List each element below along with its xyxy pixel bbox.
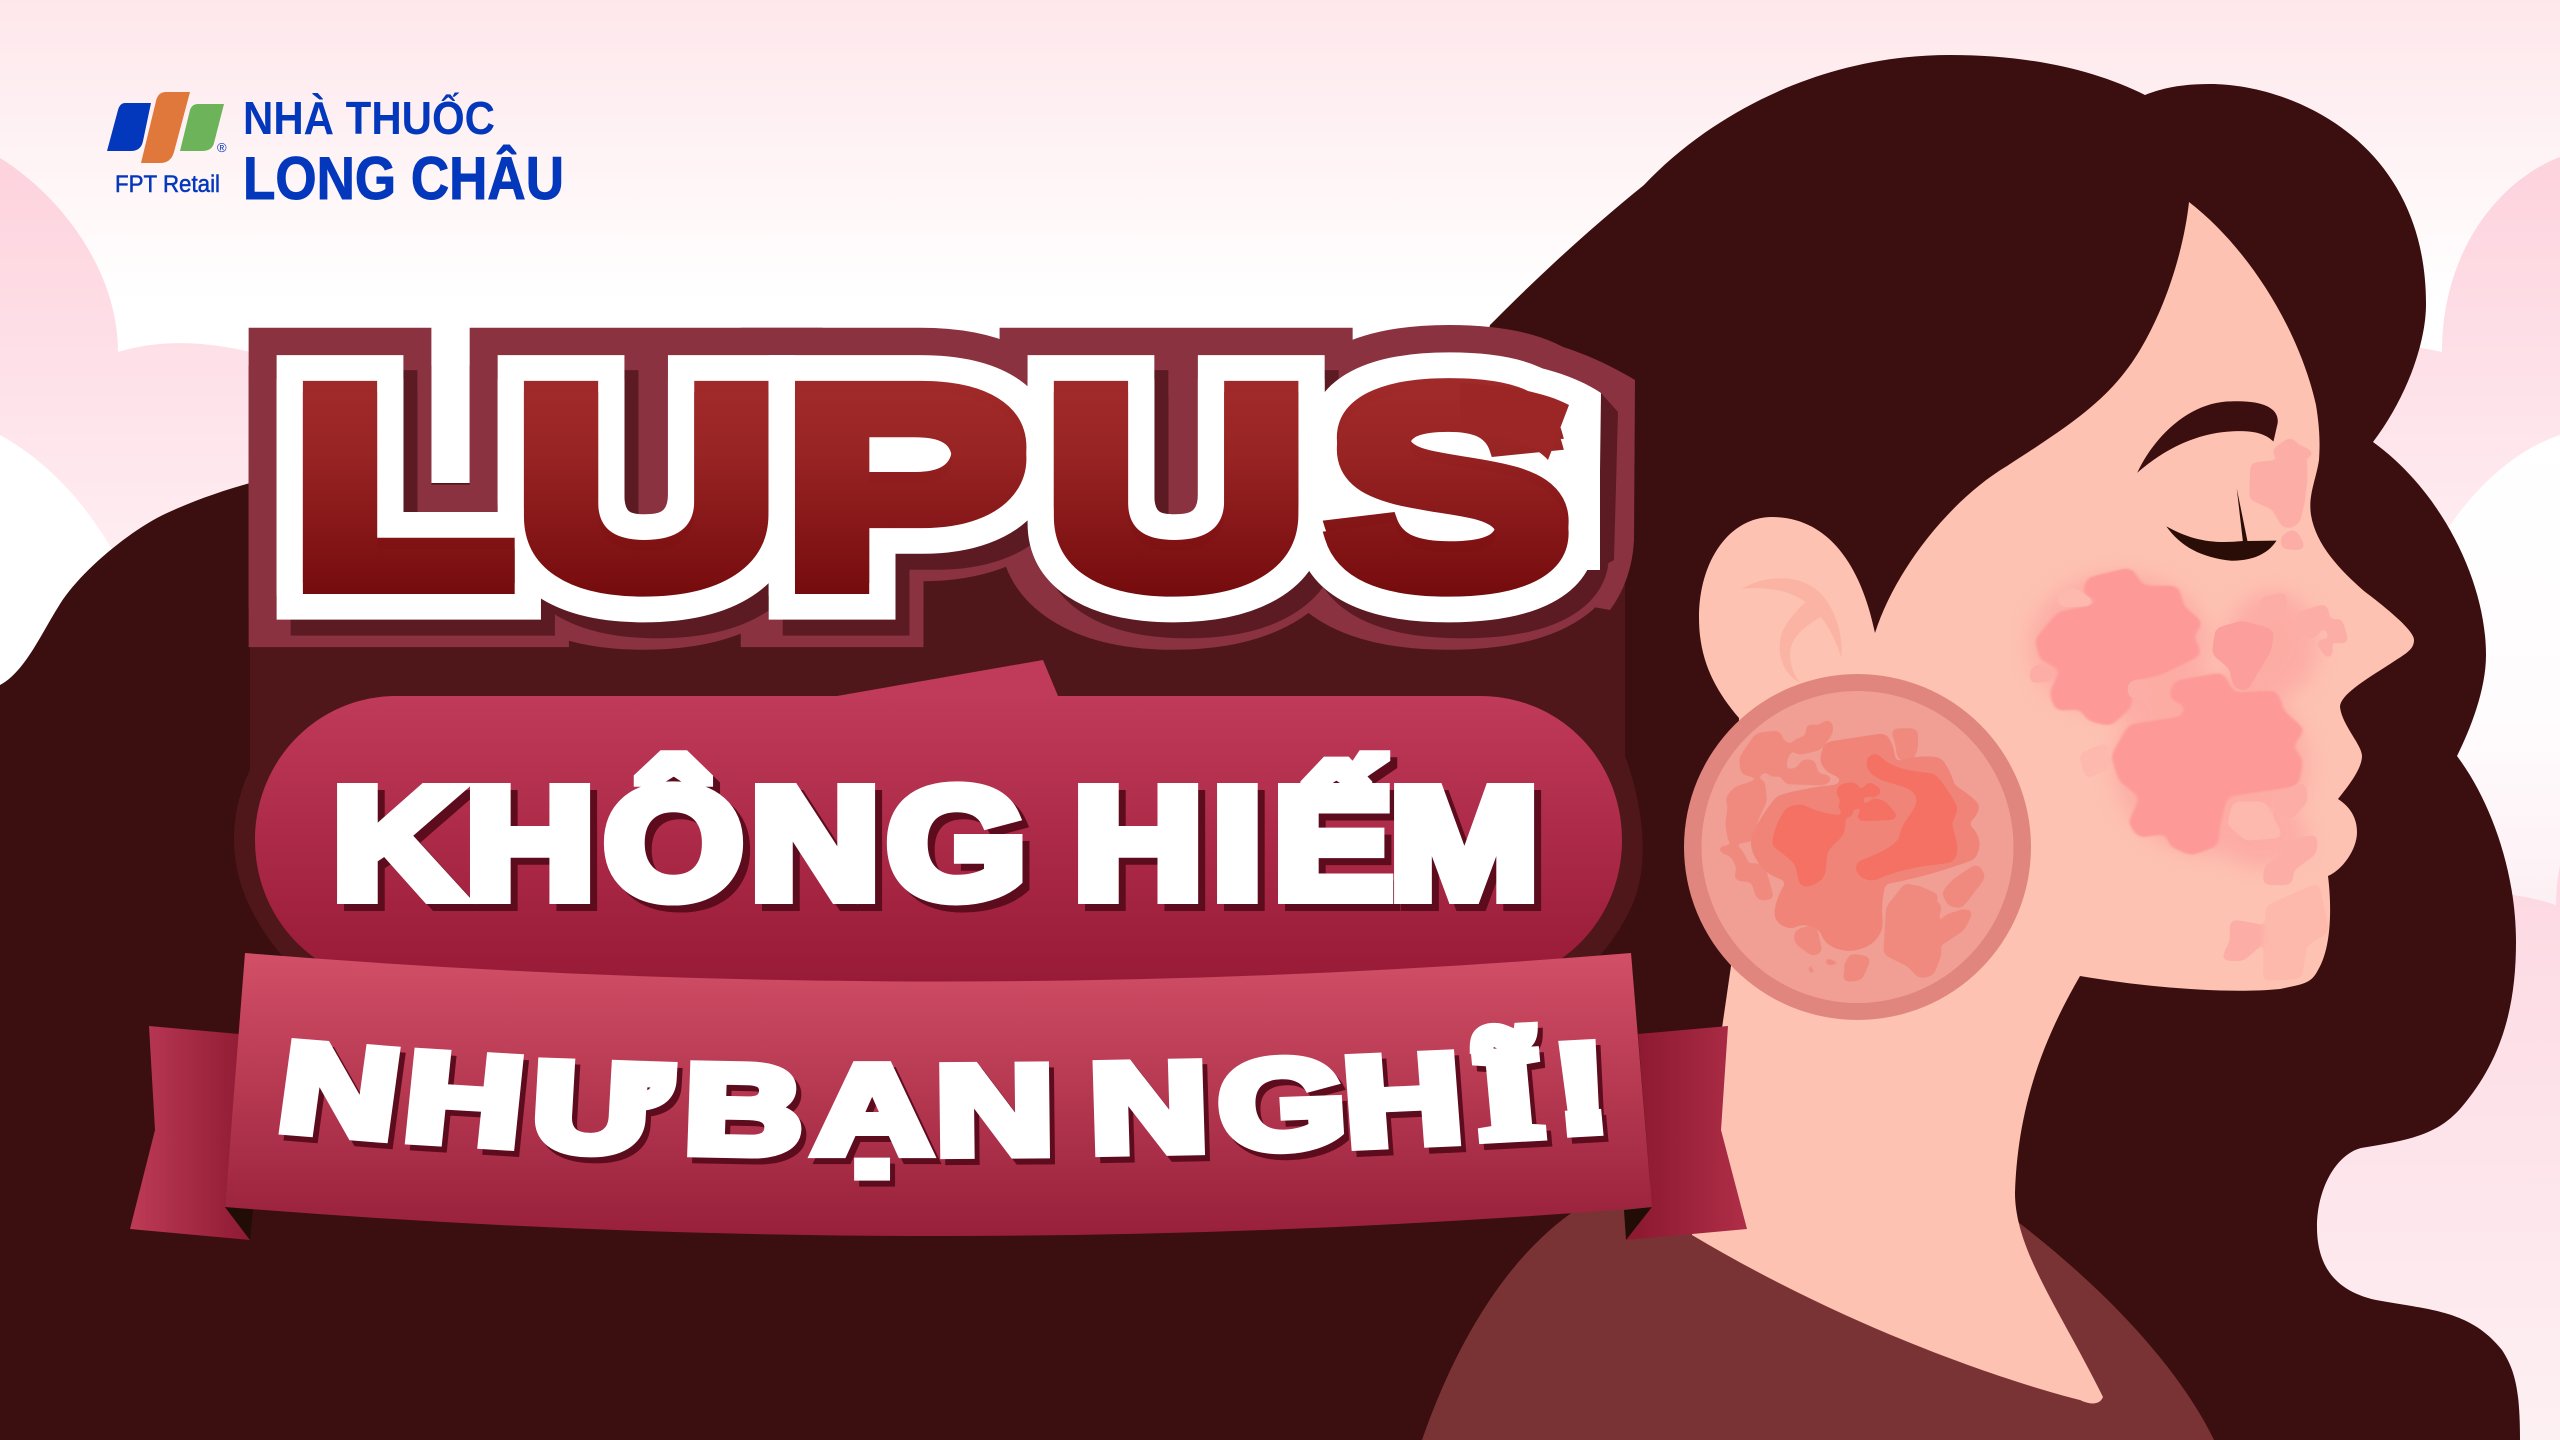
ribbon left tail <box>130 1026 253 1240</box>
rash patches around nose and chin <box>2034 442 2344 977</box>
title: LUPUS: LUPUS <box>288 317 1573 620</box>
title: LUPUS: LUPUS <box>288 341 1573 645</box>
callout pill <box>255 660 1622 984</box>
pill text: Không hiếm: KHÔNG HIẾM <box>333 756 1539 931</box>
title backing panel <box>234 380 1643 975</box>
rash glow <box>2030 573 2318 868</box>
title: LUPUS: LUPUS <box>288 348 1573 651</box>
logo text: Long Châu: LONG CHÂU <box>243 145 564 212</box>
lesions inside circle <box>1721 723 1982 979</box>
title: LUPUS: LUPUS <box>288 355 1573 658</box>
closed eye <box>2166 488 2277 561</box>
ribbon <box>225 953 1652 1236</box>
logo icon: FPT three bars: ® <box>217 140 227 155</box>
title: LUPUS: LUPUS <box>302 364 1587 667</box>
pill text: Không hiếm: KHÔNG HIẾM <box>340 763 1546 938</box>
logo <box>107 92 564 212</box>
logo text: FPT Retail: FPT Retail <box>115 171 220 198</box>
title: LUPUS: LUPUS <box>302 339 1587 642</box>
small lesions <box>1721 723 1982 979</box>
dark lesion cores <box>1772 754 1957 886</box>
ribbon right tail <box>1624 1026 1747 1240</box>
shirt <box>1422 1180 2214 1440</box>
title: LUPUS: LUPUS <box>288 324 1573 627</box>
right clouds <box>2300 157 2560 1440</box>
face details <box>1742 401 2344 977</box>
face and neck skin <box>1692 202 2414 1403</box>
ear inner fold <box>1742 578 1842 683</box>
magnified skin circle <box>1684 674 2031 1020</box>
logo icon: FPT three bars <box>107 92 227 163</box>
central lesion <box>1752 734 1979 950</box>
eyebrow <box>2137 401 2278 473</box>
ribbon text: Như bạn nghĩ!: NHƯ BẠN NGHĨ! <box>276 1022 1620 1187</box>
rash patches on cheek <box>2040 572 2299 851</box>
left clouds <box>0 158 260 700</box>
logo text: Nhà thuốc: NHÀ THUỐC <box>243 92 495 144</box>
ribbon text: Như bạn nghĩ!: NHƯ BẠN NGHĨ! <box>271 1016 1615 1181</box>
title: LUPUS: LUPUS <box>288 330 1573 634</box>
